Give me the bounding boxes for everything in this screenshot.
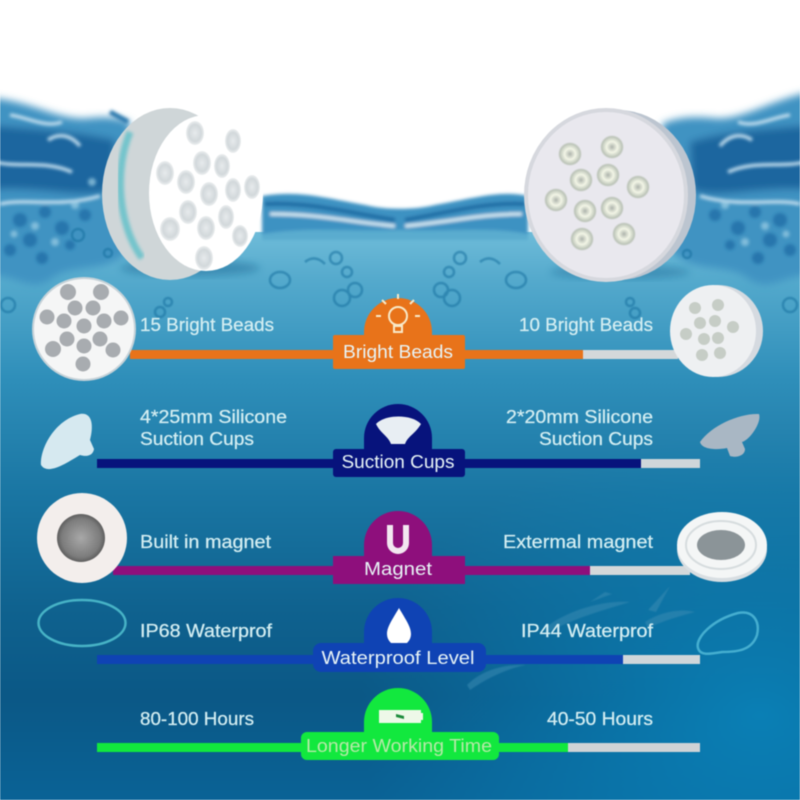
right photo: seal ring — [698, 613, 758, 654]
badge label — [333, 556, 465, 584]
icon badge: light bulb — [364, 294, 432, 345]
right photo: 10-bead light — [670, 285, 763, 377]
icon badge: battery — [364, 688, 432, 735]
left photo: built-in magnet — [37, 493, 127, 583]
icon badge: water drop — [364, 598, 432, 646]
bar: navy with gray remainder — [97, 459, 700, 468]
product photo: 15-bead light — [102, 108, 263, 280]
left label: Suction Cups — [140, 428, 254, 449]
bar: blue with gray remainder — [97, 655, 700, 664]
water splash: right — [662, 92, 800, 284]
product photo: 10-bead light — [526, 110, 696, 280]
badge label — [333, 335, 465, 369]
right label — [506, 406, 653, 449]
water wave: center — [262, 194, 528, 240]
badge label: Longer Working Time — [306, 735, 492, 756]
right label: 2*20mm Silicone — [506, 406, 653, 427]
bar: orange with gray remainder — [130, 350, 678, 359]
left photo: seal ring — [38, 600, 126, 646]
bubbles — [1, 229, 797, 318]
dolphins — [467, 586, 695, 690]
row 3: magnet — [37, 493, 767, 584]
row 4: waterproof level — [38, 598, 758, 672]
bar: purple with gray remainder — [113, 566, 690, 575]
right photo: external magnet — [677, 512, 767, 582]
right label: Extermal magnet — [503, 531, 653, 552]
left label: Built in magnet — [140, 531, 271, 552]
badge label: Waterproof Level — [322, 647, 474, 668]
icon badge: suction cup — [364, 404, 432, 450]
right label: 40-50 Hours — [547, 708, 653, 729]
row 2: suction cups — [41, 404, 759, 477]
water splash: left — [0, 98, 130, 284]
bar: green with gray remainder — [97, 743, 700, 752]
left label: 80-100 Hours — [140, 708, 254, 729]
right label: Suction Cups — [539, 428, 653, 449]
icon badge: magnet — [364, 511, 432, 558]
badge label: Bright Beads — [343, 341, 453, 362]
badge label: Magnet — [364, 558, 432, 579]
left label — [140, 406, 287, 449]
left label: 4*25mm Silicone — [140, 406, 287, 427]
right label: 10 Bright Beads — [519, 314, 653, 335]
badge label — [301, 732, 499, 760]
left label: IP68 Waterprof — [140, 620, 273, 641]
left photo: suction cup — [41, 414, 94, 469]
left photo: 15-bead face — [33, 278, 135, 380]
badge label: Suction Cups — [342, 451, 454, 472]
badge label — [333, 449, 465, 477]
right label: IP44 Waterprof — [521, 620, 654, 641]
right photo: suction cup — [700, 414, 759, 457]
left label: 15 Bright Beads — [140, 314, 274, 335]
row 5: longer working time — [97, 688, 700, 760]
row 1: bright beads — [33, 278, 763, 380]
badge label — [313, 643, 486, 672]
